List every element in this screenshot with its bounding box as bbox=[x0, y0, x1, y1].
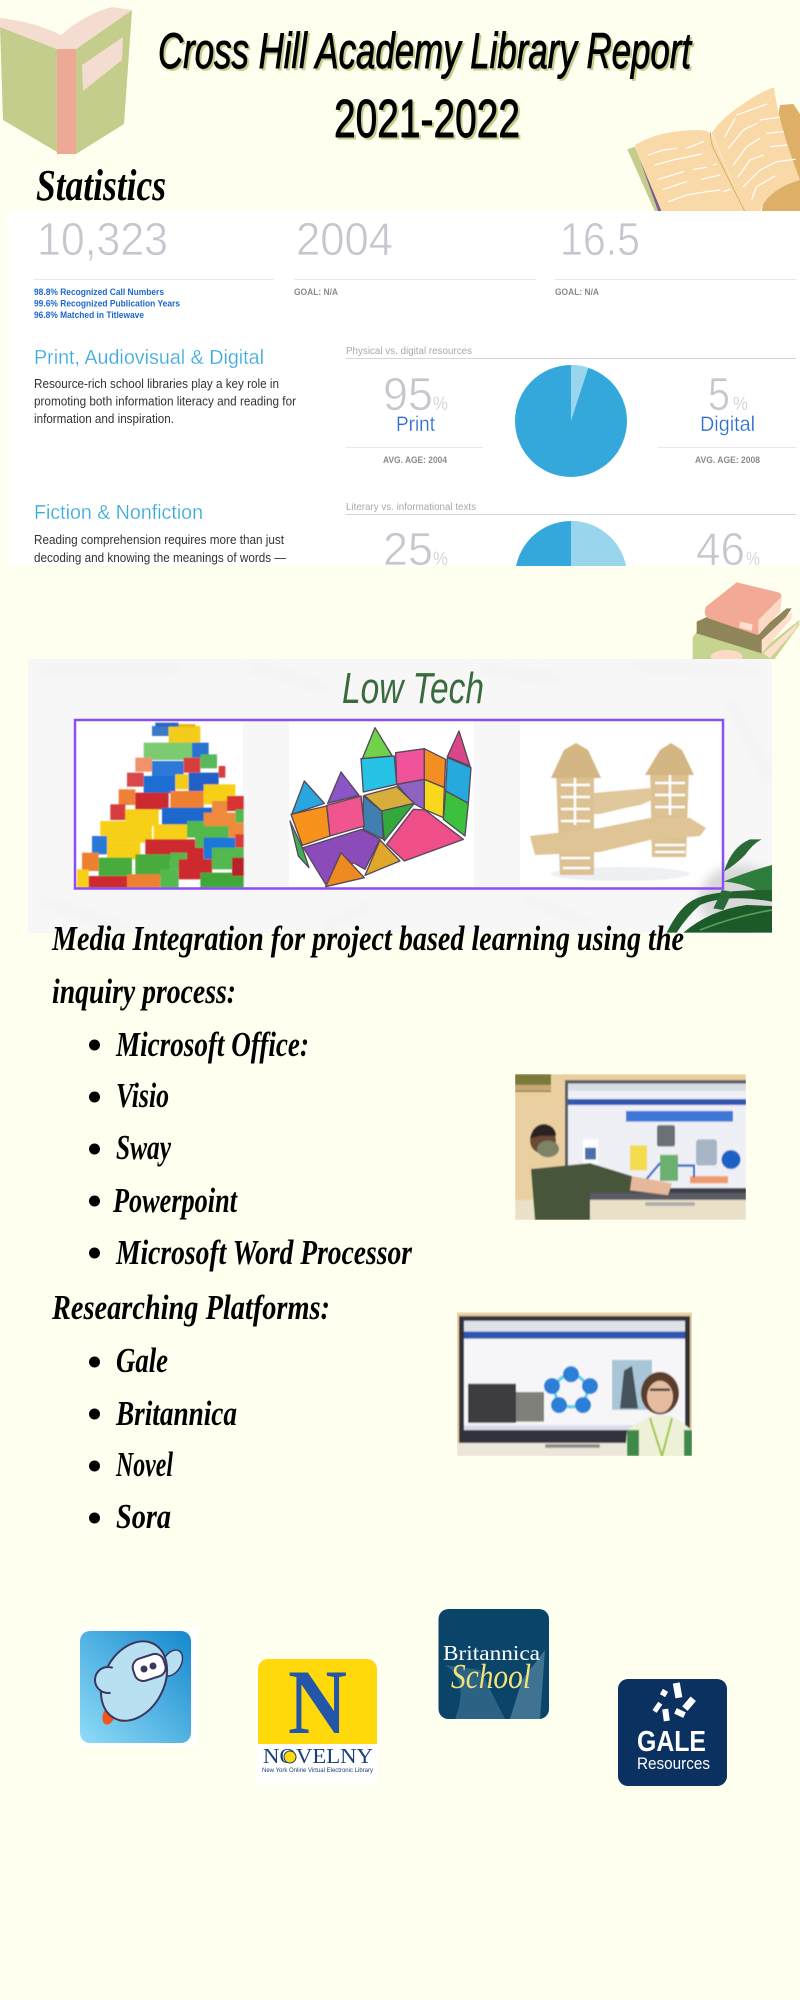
stat: collection size: 99.6% Recognized Publication Years bbox=[34, 298, 180, 308]
chart: physical vs digital pie: 5 bbox=[708, 368, 730, 420]
list: Microsoft tools: Visio bbox=[116, 1076, 169, 1115]
list: Microsoft tools bbox=[89, 1025, 412, 1272]
text block: Print, Audiovisual and Digital: Print, Audiovisual & Digital bbox=[34, 347, 264, 369]
list: Microsoft tools: Powerpoint bbox=[112, 1181, 238, 1220]
photo: student presenting research on smart board bbox=[457, 1313, 692, 1456]
title bbox=[158, 23, 692, 149]
list: research platforms: Novel bbox=[115, 1445, 173, 1484]
logo: Britannica School: School bbox=[451, 1657, 531, 1696]
text block: media integration: inquiry process: bbox=[52, 972, 236, 1011]
image: wooden block bridge bbox=[520, 742, 706, 887]
image: stacked plastic bricks bbox=[76, 721, 244, 888]
decoration: plant leaves bbox=[667, 839, 780, 935]
list: research platforms: Britannica bbox=[115, 1394, 237, 1433]
chart: literary vs informational pie: 25 bbox=[383, 523, 433, 575]
heading: Low Tech: Low Tech bbox=[342, 664, 484, 713]
list: research platforms: Gale bbox=[116, 1341, 168, 1380]
logo: NOVELny: NOVELNY bbox=[263, 1744, 373, 1768]
text block: Fiction and Nonfiction bbox=[34, 502, 286, 565]
stat: items per student bbox=[555, 223, 796, 295]
chart: physical vs digital pie: AVG. AGE: 2004 bbox=[383, 455, 447, 465]
text block: Print, Audiovisual and Digital bbox=[34, 347, 296, 426]
list: research platforms bbox=[89, 1341, 237, 1536]
panel: Low Tech bbox=[28, 659, 780, 935]
stat: collection size: 10,323 bbox=[37, 213, 168, 265]
icon: stack of books bbox=[693, 582, 799, 663]
logo: Gale Resources: Resources bbox=[637, 1754, 710, 1773]
stat: collection size: 96.8% Matched in Titlewave bbox=[34, 310, 144, 320]
logo: NOVELny bbox=[256, 1651, 378, 1785]
chart: physical vs digital pie: 95 bbox=[383, 368, 433, 420]
heading: Statistics: Statistics bbox=[36, 161, 166, 210]
chart: physical vs digital pie: Print bbox=[396, 413, 435, 436]
chart: physical vs digital pie: Physical vs. digital resources bbox=[346, 345, 472, 357]
stat: items per student: GOAL: N/A bbox=[555, 287, 599, 297]
photo: student presenting flowchart on smart board bbox=[515, 1074, 746, 1220]
icon: open book with handwriting bbox=[627, 87, 800, 212]
logo: Gale Resources bbox=[618, 1679, 727, 1786]
logo: NOVELny: N bbox=[288, 1651, 347, 1753]
list: research platforms: Sora bbox=[116, 1497, 171, 1536]
chart: physical vs digital pie: % bbox=[733, 394, 748, 415]
logo: Britannica School bbox=[438, 1609, 549, 1719]
stat: average age: 2004 bbox=[296, 213, 393, 265]
image frame: purple border bbox=[75, 720, 723, 888]
chart: literary vs informational pie: % bbox=[746, 549, 760, 570]
chart: literary vs informational pie: 46 bbox=[696, 523, 745, 575]
text block: Print, Audiovisual and Digital: Resource-rich school libraries play a key role in bbox=[34, 377, 279, 391]
chart: physical vs digital pie bbox=[346, 345, 796, 477]
list: Microsoft tools: Microsoft Word Processor bbox=[115, 1233, 412, 1272]
panel: statistics report bbox=[8, 211, 800, 566]
logo: Gale Resources: GALE bbox=[637, 1726, 706, 1758]
title: 2021-2022 bbox=[334, 89, 520, 149]
list: Microsoft tools: Sway bbox=[116, 1128, 171, 1167]
chart: literary vs informational pie: % bbox=[433, 549, 448, 570]
heading: researching platforms: Researching Platforms: bbox=[51, 1288, 330, 1327]
stat: average age bbox=[294, 222, 536, 295]
list: Microsoft tools: Microsoft Office: bbox=[115, 1025, 309, 1064]
stat: collection size bbox=[34, 222, 274, 318]
text block: media integration bbox=[51, 919, 684, 1011]
text block: Print, Audiovisual and Digital: information and inspiration. bbox=[34, 412, 174, 426]
chart: literary vs informational pie bbox=[346, 502, 796, 566]
logo: Britannica School: Britannica bbox=[443, 1641, 541, 1665]
logo: NOVELny: New York Online Virtual Electronic Library bbox=[262, 1768, 373, 1774]
stat: collection size: 98.8% Recognized Call Numbers bbox=[34, 287, 164, 297]
text block: Fiction and Nonfiction: Reading comprehension requires more than just bbox=[34, 533, 284, 547]
text block: Fiction and Nonfiction: decoding and knowing the meanings of words — bbox=[34, 551, 286, 565]
chart: physical vs digital pie: Digital bbox=[700, 413, 755, 436]
icon: green closed book bbox=[0, 7, 132, 154]
stat: average age: GOAL: N/A bbox=[294, 287, 338, 297]
text block: Fiction and Nonfiction: Fiction & Nonfiction bbox=[34, 502, 203, 524]
chart: literary vs informational pie: Literary vs. informational texts bbox=[346, 501, 476, 513]
text block: Print, Audiovisual and Digital: promoting both information literacy and reading for bbox=[34, 394, 296, 408]
logo: Sora bbox=[79, 1627, 198, 1747]
stat: items per student: 16.5 bbox=[560, 213, 640, 265]
chart: physical vs digital pie: % bbox=[433, 394, 448, 415]
chart: physical vs digital pie: AVG. AGE: 2008 bbox=[695, 455, 760, 465]
image: magnetic tiles bbox=[289, 721, 474, 887]
